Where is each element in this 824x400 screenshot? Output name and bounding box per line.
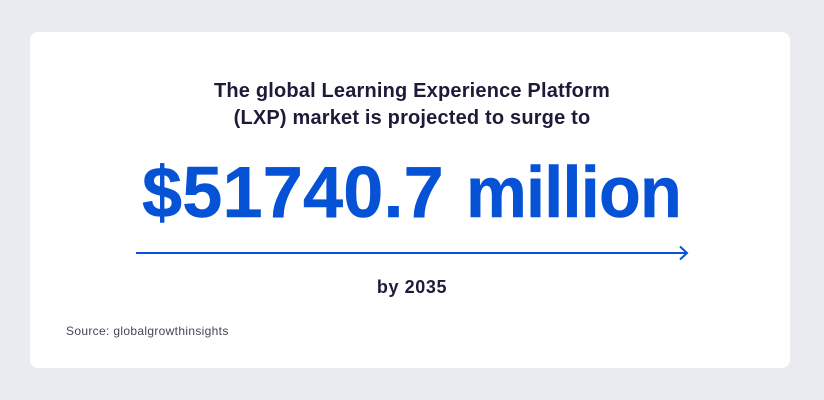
panel: card xyxy=(30,32,790,368)
source: Source: globalgrowthinsights xyxy=(66,324,229,338)
big number xyxy=(142,153,681,233)
heading: The global Learning Experience Platform xyxy=(214,80,610,102)
arrow xyxy=(136,246,688,260)
big number: $51740.7 xyxy=(142,153,444,233)
heading xyxy=(214,80,610,129)
big number: million xyxy=(466,153,681,233)
heading: (LXP) market is projected to surge to xyxy=(234,107,590,129)
date label: by 2035 xyxy=(377,277,447,297)
